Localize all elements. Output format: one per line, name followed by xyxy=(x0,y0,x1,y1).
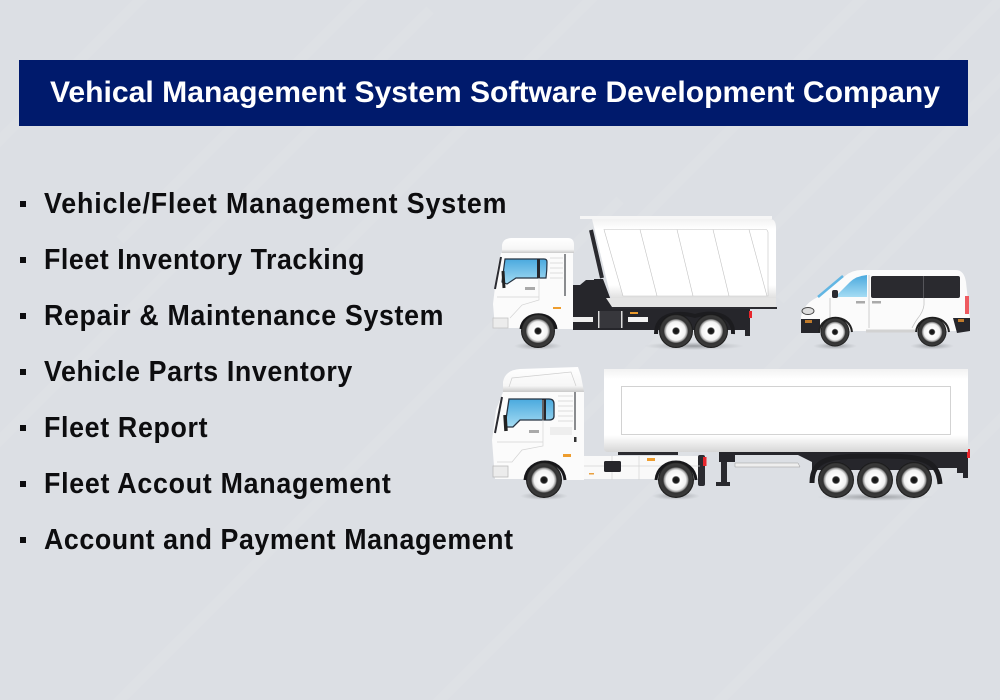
chassis xyxy=(573,279,750,336)
wheels xyxy=(526,462,562,498)
tractor deck xyxy=(584,456,698,479)
trailer chassis xyxy=(719,452,968,478)
wheels xyxy=(820,318,850,346)
item: vehicle parts inventory: Vehicle Parts Inventory xyxy=(44,355,353,387)
bumpers xyxy=(801,319,820,333)
trailer body xyxy=(604,369,968,452)
cab xyxy=(493,253,573,329)
icon: van xyxy=(801,270,970,350)
item: fleet inventory tracking: Fleet Inventory Tracking xyxy=(44,243,365,275)
fenders xyxy=(656,314,733,334)
wheels xyxy=(521,314,555,348)
feature list xyxy=(20,187,513,555)
item: fleet account management: Fleet Accout Management xyxy=(44,467,391,499)
icon: semi-trailer truck xyxy=(492,367,970,501)
item: vehicle fleet management: Vehicle/Fleet Management System xyxy=(44,187,506,219)
title banner: Vehical Management System Software Development Company xyxy=(50,76,940,109)
icon: dump truck xyxy=(493,216,777,350)
item: repair and maintenance: Repair & Maintenance System xyxy=(44,299,444,331)
item: account and payment: Account and Payment Management xyxy=(44,523,513,555)
cab xyxy=(492,392,584,480)
item: fleet report: Fleet Report xyxy=(44,411,208,443)
dump body xyxy=(580,216,772,219)
title banner xyxy=(19,60,968,126)
